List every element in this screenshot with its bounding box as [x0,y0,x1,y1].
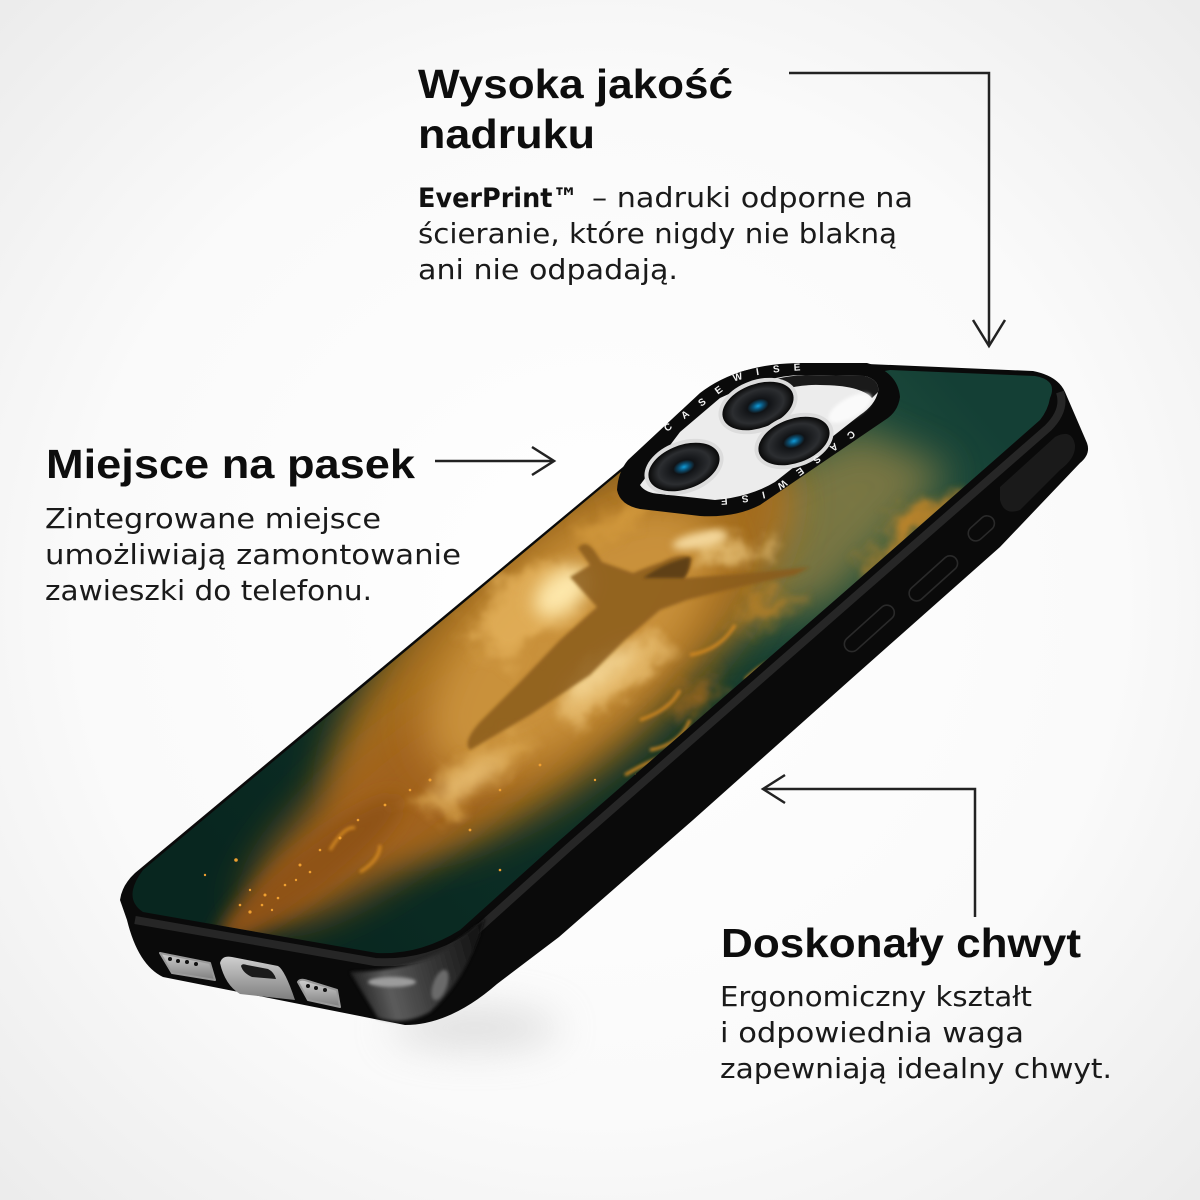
rim lettering top: CASEWISE [664,364,800,431]
body line 3: ani nie odpadają. [418,253,678,286]
figure [468,544,810,750]
heading: Miejsce na pasek [46,441,415,487]
lens left [637,429,731,505]
body line 1: – nadruki odporne na [592,181,913,214]
body line 2: umożliwiają zamontowanie [45,538,461,571]
heading: Doskonały chwyt [721,920,1081,966]
lens right [747,403,841,479]
lens top [711,368,805,444]
body bold name: EverPrint™ [418,183,578,214]
glossy corner [350,918,485,1021]
body line 2: i odpowiednia waga [720,1016,1024,1049]
camera window [640,375,878,500]
charging port [220,957,295,1000]
callout: strap slot [45,441,461,607]
phone shadow [390,1008,560,1048]
body line 1: Zintegrowane miejsce [45,502,381,535]
arrow to camera island [435,447,554,475]
side grip panel [1000,434,1075,512]
artwork screen [132,370,1052,953]
callout: print quality [418,61,913,286]
speaker grill right [298,980,340,1007]
arrow to side grip [763,775,975,917]
upper light rays [640,430,950,640]
clouds [404,477,975,824]
case body [120,364,1088,1025]
body line 3: zapewniają idealny chwyt. [720,1052,1112,1085]
heading: Wysoka jakość [418,61,733,107]
body line 2: ścieranie, które nigdy nie blakną [418,217,897,250]
figure head [643,557,690,578]
sparks [204,764,637,914]
camera island [617,363,900,516]
side bevel highlight [135,392,1062,962]
body line 3: zawieszki do telefonu. [45,574,372,607]
swirls [330,625,775,872]
rim lettering bottom: CASEWISE [721,431,854,505]
phone case illustration [120,363,1088,1025]
arrow to top of the case [789,73,1005,346]
side buttons [841,513,998,655]
callout: perfect grip [720,920,1112,1085]
heading line 2: nadruku [418,111,595,157]
body line 1: Ergonomiczny kształt [720,980,1032,1013]
speaker grill left [160,953,215,980]
